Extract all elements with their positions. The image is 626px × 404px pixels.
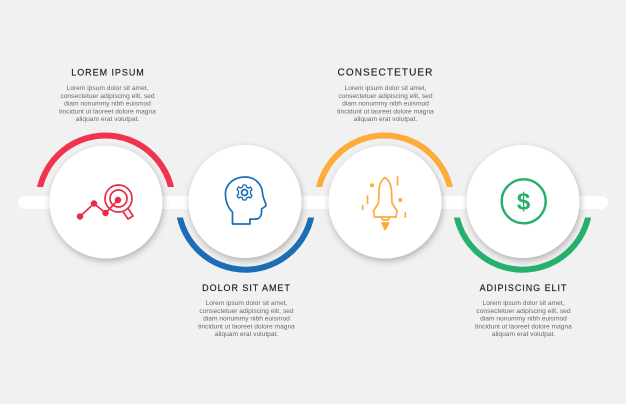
circle 1 — [50, 146, 162, 258]
step 1 text: diam nonummy nibh euismod — [64, 100, 151, 108]
step 1 text: aliquam erat volutpat. — [76, 116, 139, 123]
arc: orange — [316, 132, 453, 187]
arc: blue — [176, 218, 314, 273]
step 4 text: diam nonummy nibh euismod — [480, 316, 567, 322]
step 3 text: Lorem ipsum dolor sit amet, — [345, 85, 427, 92]
step 3 text: aliquam erat volutpat. — [354, 116, 417, 123]
icon: dollar coin: $ — [517, 188, 531, 216]
circle 2 — [188, 145, 302, 258]
step 2 text: Lorem ipsum dolor sit amet, — [206, 300, 288, 307]
step 2 text: consectetuer adipiscing elit, sed — [199, 308, 294, 315]
infographic — [18, 68, 608, 338]
step 3 text: diam nonummy nibh euismod — [342, 100, 429, 108]
circle 3 — [328, 146, 442, 258]
step 1 text: consectetuer adipiscing elit, sed — [60, 93, 155, 100]
step 3 text: CONSECTETUER — [338, 68, 433, 78]
step 4 text: Lorem ipsum dolor sit amet, — [483, 300, 565, 307]
step 2 text: tincidunt ut laoreet dolore magna — [198, 323, 295, 330]
step 1 text: Lorem ipsum dolor sit amet, — [67, 85, 149, 92]
step 4 text: ADIPISCING ELIT — [480, 283, 567, 293]
step 2 text: diam nonummy nibh euismod — [203, 316, 290, 322]
step 1 text: tincidunt ut laoreet dolore magna — [59, 108, 156, 115]
step 4 text: tincidunt ut laoreet dolore magna — [475, 323, 572, 330]
step 2 text — [198, 283, 295, 338]
step 2 text: DOLOR SIT AMET — [202, 283, 291, 293]
step 4 text — [475, 283, 572, 338]
arc: green — [454, 218, 592, 273]
icon: dollar coin — [502, 179, 546, 223]
icon: rocket — [363, 177, 405, 230]
step 1 text — [59, 68, 156, 123]
step 3 text: consectetuer adipiscing elit, sed — [338, 93, 433, 100]
circle 4 — [466, 145, 580, 258]
step 3 text: tincidunt ut laoreet dolore magna — [337, 108, 434, 115]
icon: head with gear — [225, 177, 266, 224]
step 1 text: LOREM IPSUM — [71, 68, 145, 78]
arc: red — [37, 132, 174, 187]
step 4 text: aliquam erat volutpat. — [492, 331, 555, 338]
connector bar — [18, 196, 608, 209]
step 3 text — [337, 68, 434, 123]
step 2 text: aliquam erat volutpat. — [215, 331, 278, 338]
icon: target chart — [78, 185, 133, 219]
step 4 text: consectetuer adipiscing elit, sed — [476, 308, 571, 315]
